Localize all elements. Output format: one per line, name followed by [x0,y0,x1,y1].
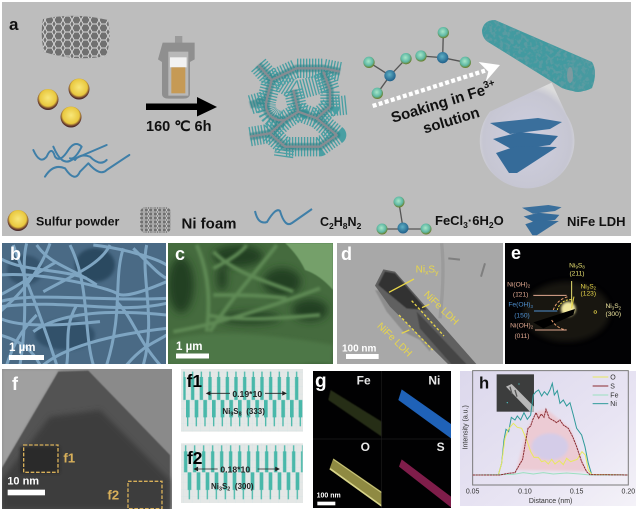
scale bar 1 µm [9,342,44,360]
panel e: SAED diffraction pattern: 8 [582,265,585,270]
legend item: C2H8N2: 2 [357,221,362,231]
panel e: SAED diffraction pattern: Ni [581,283,587,290]
panel f2: lattice profile [181,443,303,503]
axes labels: 0.15 [570,489,584,496]
panel f2: lattice profile: 2 [227,487,230,493]
panel e: SAED diffraction pattern: 3 [531,304,534,309]
legend item: Ni foam [140,207,171,233]
panel e: SAED diffraction pattern: 2 [619,305,622,310]
panel e: SAED diffraction pattern: 2 [528,284,531,289]
panel f2: lattice profile: Ni [211,482,219,491]
panel d: TEM nanorod: y [435,270,439,277]
legend item: C2H8N2: 2 [329,221,334,231]
panel e: SAED diffraction pattern: Ni [569,262,575,269]
axes labels: 0.05 [466,489,480,496]
legend [593,374,619,408]
label f1: f1 [187,371,202,391]
legend label: Ni foam: Ni foam [182,216,237,232]
map: Ni: Ni [428,373,440,387]
legend: materials key [8,196,626,235]
panel e: SAED diffraction pattern: Ni [606,303,612,310]
label: Soaking in Fe3+ solution: 3+ [482,78,496,92]
legend item: C2H8N2: C [320,215,329,229]
panel e: SAED diffraction pattern [505,243,631,364]
panel e: SAED diffraction pattern: Ni(OH) [510,322,531,329]
panel f1: lattice profile: 8 [239,412,242,418]
panel d: TEM nanorod: Ni [416,264,425,275]
legend item: sulfur powder [8,210,119,231]
panel g: EDS element maps [313,371,451,508]
label h: h [479,373,489,392]
label: Soaking in Fe3+ solution: solution [421,104,482,137]
label f: f [12,374,19,394]
label c: c [175,244,185,264]
panel e: SAED diffraction pattern: S [589,283,594,290]
series: S [473,409,628,475]
panel c: SEM green fibers [168,243,334,364]
panel e: SAED diffraction pattern: Fe(OH) [508,302,531,309]
icon: autoclave reactor [158,36,195,99]
panel f: HRTEM image: f1 [63,450,76,465]
legend item: C2H8N2: N [348,215,357,229]
map: O: O [361,440,370,454]
scale bar 1 µm: 1 µm [9,342,35,354]
icon: FeCl3 molecules [363,27,471,99]
label b: b [10,244,21,264]
series: O [473,423,628,475]
legend: O [610,374,616,381]
panel letter a: a [9,15,19,34]
panel e: SAED diffraction pattern: 2 [531,325,534,330]
icon: Ni foam block [42,16,110,58]
series: Ni [473,383,628,475]
panel f1: lattice profile: 9 [230,412,233,418]
panel e: SAED diffraction pattern: 3 [612,305,615,310]
panel e: SAED diffraction pattern: (211) [569,270,584,277]
panel f1: lattice profile: Ni [222,407,230,416]
legend item: FeCl3·6H2O: 3 [463,220,468,230]
panel e: SAED diffraction pattern: (123) [581,290,596,297]
legend: Ni [610,401,617,408]
panel f2: lattice profile: S [222,482,228,491]
panel f2: lattice profile: (300) [235,482,254,491]
legend item: FeCl3·6H2O [376,196,504,234]
axes labels [463,405,635,505]
axes labels: Intensity (a.u.) [463,405,470,449]
legend: Fe [610,392,619,399]
label: Soaking in Fe3+ solution: Soaking in Fe [389,82,487,127]
panel f2: lattice profile: 3 [219,487,222,493]
panel b: SEM blue fibers [0,243,167,365]
icon: C2H8N2 wavy chains [33,144,129,177]
panel d: TEM nanorod: S [428,264,435,275]
panel e: SAED diffraction pattern: 2 [594,286,597,291]
label f2: f2 [187,448,202,468]
legend item: C2H8N2 [255,209,362,231]
series: Fe [473,473,628,475]
label: Soaking in Fe3+ solution [389,78,504,145]
annotations: rod labels [389,279,444,350]
legend item: FeCl3·6H2O: O [494,213,504,228]
panel h: line-scan chart [460,371,636,506]
panel f: HRTEM image: f2 [107,487,119,502]
panel g: EDS element maps: 100 nm [317,492,341,499]
panel f1: lattice profile [181,369,303,432]
icon: bubble with NiFe LDH layers [480,83,574,188]
panel d: TEM nanorod: NiFe LDH [375,321,414,359]
panel d: TEM nanorod: 100 nm [342,343,377,354]
panel d: TEM nanorod: x [425,270,429,277]
panel e: SAED diffraction pattern: S [614,303,619,310]
axes labels: 0.20 [622,489,635,496]
panel a: synthesis schematic [2,2,631,236]
panel e: SAED diffraction pattern: 3 [587,286,590,291]
arrow: dotted soaking arrow [373,62,500,106]
legend item: FeCl3·6H2O: FeCl [435,213,463,228]
axes labels: 0.10 [518,489,532,496]
legend item: NiFe LDH [522,205,626,235]
panel f1: lattice profile: 0.19*10 [232,389,262,399]
label e: e [511,243,521,263]
map: S: S [437,440,445,454]
icon: sulfur balls [38,78,90,128]
icon: teal nanostructure on foam [250,65,347,158]
legend item: sulfur powder: Sulfur powder [36,214,119,228]
panel e: SAED diffraction pattern: (1̄21) [513,291,528,298]
scale bar 1 µm [176,341,209,358]
axes labels: Distance (nm) [529,498,572,505]
legend item: C2H8N2: 8 [343,221,348,231]
arrow: hydrothermal step [146,97,217,116]
annotation: f1 and f2 regions [24,445,162,509]
panel e: SAED diffraction pattern: S [578,262,583,269]
panel e: SAED diffraction pattern: (150) [514,313,530,320]
map: Fe: Fe [357,373,371,387]
panel e: SAED diffraction pattern: Ni(OH) [507,281,528,288]
label d: d [341,244,352,264]
label: 160 ℃ 6h: 160 ℃ 6h [146,119,211,135]
panel f2: lattice profile: 0.18*10 [220,464,250,474]
panel f1: lattice profile: (333) [246,407,265,416]
scale bar 1 µm: 1 µm [176,341,202,353]
panel e: SAED diffraction pattern: 9 [575,265,578,270]
chart fills [517,409,587,472]
icon: teal nanotube [482,20,595,92]
inset: STEM image [497,374,534,412]
label g: g [315,371,327,392]
panel f: HRTEM image: 10 nm [7,476,39,488]
panel d: TEM nanorod: NiFe LDH [421,289,460,328]
legend: S [610,383,615,390]
panel d: TEM nanorod [337,243,503,364]
panel f: HRTEM image [2,369,172,510]
panel f1: lattice profile: S [233,407,239,416]
legend item: NiFe LDH: NiFe LDH [567,214,626,229]
legend item: FeCl3·6H2O: 2 [489,220,494,230]
panel e: SAED diffraction pattern: (011) [514,333,530,340]
legend item: FeCl3·6H2O: ·6H [468,213,489,228]
legend item: C2H8N2: H [334,215,343,229]
panel e: SAED diffraction pattern: (300) [606,311,621,318]
